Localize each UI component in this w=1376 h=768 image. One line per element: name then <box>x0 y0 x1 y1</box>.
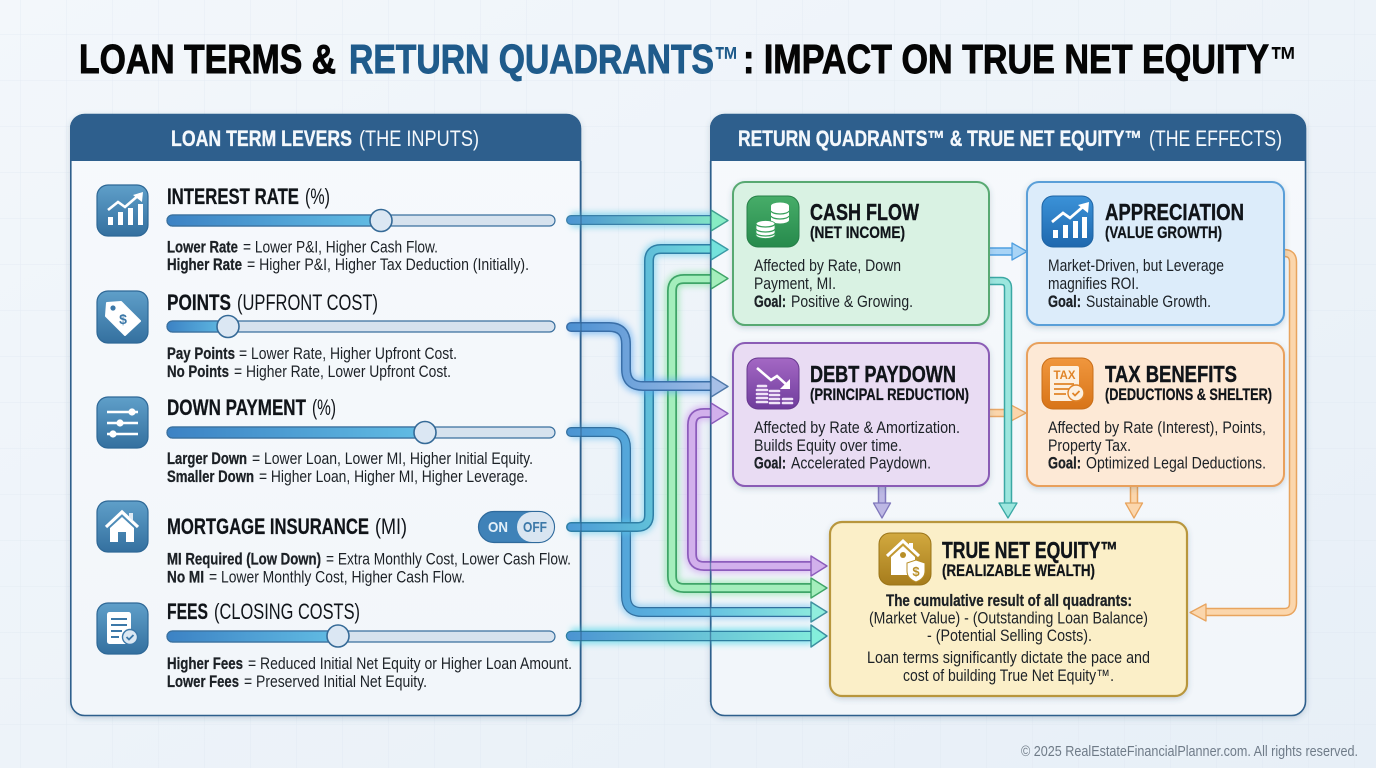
body text <box>1048 257 1224 311</box>
panel: loan term levers background <box>70 114 581 716</box>
toggle switch <box>478 512 554 542</box>
heading: (PRINCIPAL REDUCTION) <box>810 386 969 404</box>
heading: return quadrants and true net equity: RETURN QUADRANTS™ & TRUE NET EQUITY™ <box>738 126 1142 151</box>
heading: loan term levers: LOAN TERM LEVERS <box>171 126 352 151</box>
card: debt paydown <box>733 343 989 486</box>
description: Higher Rate <box>167 256 242 274</box>
arrow: debt paydown to tax benefits <box>989 405 1026 421</box>
icon: falling arrow with coins <box>747 358 799 409</box>
description: = Higher Loan, Higher MI, Higher Leverage. <box>259 468 528 486</box>
lever: interest rate <box>97 184 555 274</box>
arrow: interest rate to cash flow <box>571 210 728 231</box>
label <box>167 599 360 624</box>
arrow: cash flow to true net equity <box>989 281 1017 518</box>
heading: CASH FLOW <box>810 199 920 225</box>
toggle switch: OFF <box>523 519 547 536</box>
icon: price tag <box>97 291 148 343</box>
body text: - (Potential Selling Costs). <box>927 627 1092 645</box>
label: (UPFRONT COST) <box>237 290 378 315</box>
heading: TAX BENEFITS <box>1105 361 1237 387</box>
description <box>167 550 571 586</box>
icon: tax document: TAX <box>1054 368 1076 382</box>
label: POINTS <box>167 290 231 315</box>
description <box>167 450 533 486</box>
body text: Affected by Rate (Interest), Points, <box>1048 419 1266 437</box>
description: Higher Fees <box>167 655 243 673</box>
description: = Higher Rate, Lower Upfront Cost. <box>234 363 451 381</box>
body text: magnifies ROI. <box>1048 275 1139 293</box>
heading <box>810 361 969 404</box>
card: tax benefits <box>1027 343 1284 486</box>
icon: house with shield: $ <box>912 564 920 579</box>
description: = Lower Monthly Cost, Higher Cash Flow. <box>209 568 465 586</box>
card: appreciation <box>1027 182 1284 325</box>
lever: down payment <box>97 395 555 486</box>
title: LOAN TERMS & <box>79 36 336 82</box>
label: INTEREST RATE <box>167 184 299 209</box>
lever: fees <box>97 599 572 691</box>
lever: points <box>97 290 555 381</box>
arrow: tax benefits to true net equity <box>1126 487 1142 518</box>
icon: rising chart <box>1042 196 1093 247</box>
label: (%) <box>312 395 336 420</box>
body text: Affected by Rate, Down <box>754 257 901 275</box>
label: (MI) <box>375 514 407 539</box>
label: (CLOSING COSTS) <box>214 599 360 624</box>
arrow: cash flow to appreciation <box>989 243 1027 260</box>
heading <box>1105 199 1244 242</box>
description: Larger Down <box>167 450 247 468</box>
card: cash flow <box>733 182 989 325</box>
label: DOWN PAYMENT <box>167 395 306 420</box>
title: RETURN QUADRANTS <box>349 36 714 82</box>
heading: loan term levers: (THE INPUTS) <box>359 126 479 151</box>
icon: house <box>97 501 148 552</box>
body text: Goal: <box>1048 293 1081 311</box>
icon: tax document <box>1042 358 1093 409</box>
icon: rising chart <box>97 185 148 236</box>
heading: APPRECIATION <box>1105 199 1244 225</box>
description: No MI <box>167 568 204 586</box>
slider <box>167 422 555 444</box>
description: = Higher P&I, Higher Tax Deduction (Initially). <box>247 256 529 274</box>
icon: coin stacks <box>747 196 799 247</box>
body text: Goal: <box>754 293 786 311</box>
arrow: green link between cash flow and true net equity <box>672 268 827 598</box>
icon: sliders <box>97 397 148 448</box>
icon: document check <box>97 603 148 654</box>
body text: Accelerated Paydown. <box>791 454 931 472</box>
body text: Goal: <box>754 454 786 472</box>
slider <box>167 316 555 338</box>
body text: Market-Driven, but Leverage <box>1048 257 1224 275</box>
description <box>167 238 529 274</box>
title: ™ <box>1270 40 1297 82</box>
arrow: appreciation to true net equity <box>1190 253 1293 621</box>
label: (%) <box>305 184 330 209</box>
body text: cost of building True Net Equity™. <box>903 667 1114 685</box>
heading: DEBT PAYDOWN <box>810 361 956 387</box>
slider <box>167 625 555 647</box>
body text: Builds Equity over time. <box>754 437 902 455</box>
lever: mortgage insurance <box>97 501 571 586</box>
body text: Goal: <box>1048 454 1081 472</box>
slider <box>167 210 555 232</box>
description: Pay Points <box>167 345 235 363</box>
toggle switch: ON <box>488 519 508 536</box>
body text: (Market Value) - (Outstanding Loan Balance) <box>869 610 1148 628</box>
card: true net equity <box>830 522 1187 696</box>
description <box>167 655 572 691</box>
heading: (NET INCOME) <box>810 224 905 242</box>
label: MORTGAGE INSURANCE <box>167 514 369 539</box>
icon: price tag: $ <box>119 311 127 327</box>
title: : IMPACT ON TRUE NET EQUITY <box>743 36 1269 82</box>
heading: (VALUE GROWTH) <box>1105 224 1222 242</box>
body text <box>754 257 913 311</box>
description: = Lower Rate, Higher Upfront Cost. <box>239 345 457 363</box>
description: = Lower P&I, Higher Cash Flow. <box>243 238 438 256</box>
description: = Reduced Initial Net Equity or Higher Loan Amount. <box>248 655 572 673</box>
arrow: down payment to true net equity <box>571 432 827 622</box>
body text: Property Tax. <box>1048 437 1131 455</box>
icon: house with shield <box>879 533 931 585</box>
description: Smaller Down <box>167 468 254 486</box>
description: Lower Rate <box>167 238 238 256</box>
heading: TRUE NET EQUITY™ <box>942 537 1118 563</box>
description <box>167 345 457 381</box>
heading: (REALIZABLE WEALTH) <box>942 562 1095 580</box>
body text: Affected by Rate & Amortization. <box>754 419 960 437</box>
arrow: fees to true net equity <box>571 625 827 647</box>
body text: Payment, MI. <box>754 275 836 293</box>
heading: return quadrants and true net equity: (THE EFFECTS) <box>1149 126 1282 151</box>
body text <box>867 592 1150 685</box>
heading <box>810 199 920 242</box>
body text: Optimized Legal Deductions. <box>1086 454 1266 472</box>
body text: Positive & Growing. <box>791 293 913 311</box>
description: = Preserved Initial Net Equity. <box>244 673 427 691</box>
arrow: mortgage insurance to cash flow <box>571 239 728 527</box>
description: = Lower Loan, Lower MI, Higher Initial Equity. <box>252 450 533 468</box>
panel: return quadrants background <box>710 114 1306 716</box>
arrow: purple link between debt paydown and true net equity <box>692 403 827 576</box>
title <box>79 36 1297 82</box>
description: No Points <box>167 363 229 381</box>
body text <box>1048 419 1266 472</box>
body text <box>754 419 960 472</box>
title: ™ <box>714 40 739 82</box>
heading <box>942 537 1118 580</box>
description: = Extra Monthly Cost, Lower Cash Flow. <box>326 550 571 568</box>
body text: Sustainable Growth. <box>1086 293 1211 311</box>
heading <box>1105 361 1272 404</box>
arrow: debt paydown to true net equity <box>874 487 890 518</box>
label <box>167 290 378 315</box>
body text: Loan terms significantly dictate the pace and <box>867 649 1150 667</box>
body text: The cumulative result of all quadrants: <box>886 592 1132 610</box>
description: MI Required (Low Down) <box>167 550 321 568</box>
arrow: points to debt paydown <box>571 327 728 397</box>
label: FEES <box>167 599 208 624</box>
heading: (DEDUCTIONS & SHELTER) <box>1105 386 1272 404</box>
description: Lower Fees <box>167 673 239 691</box>
